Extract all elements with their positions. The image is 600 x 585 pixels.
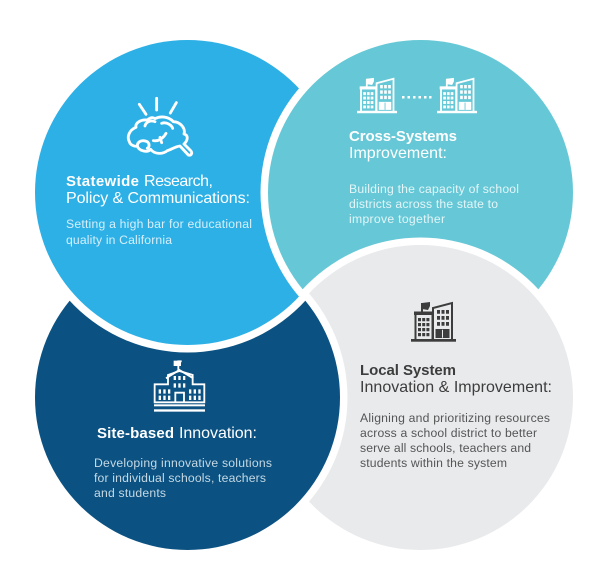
panel: dark blue circle: [35, 300, 340, 550]
text: site-based description: for individual schools, teachers: [94, 471, 266, 485]
text: statewide description: [66, 217, 252, 247]
text: site-based description: [94, 456, 272, 500]
text: local system description: students within the system: [360, 456, 507, 470]
icon: two buildings with dotted connection: [357, 78, 477, 113]
heading: cross-systems: [349, 128, 457, 162]
icon: brain: [128, 98, 192, 155]
heading: site-based: Site-based: [97, 425, 174, 442]
heading: statewide: Research,: [144, 173, 213, 190]
text: local system description: [360, 411, 550, 470]
icon: local building: [411, 302, 456, 342]
text: cross-systems description: districts across the state to: [349, 197, 498, 211]
text: cross-systems description: improve together: [349, 212, 445, 226]
heading: local system: [360, 362, 552, 396]
heading: statewide: Policy & Communications:: [66, 190, 250, 207]
text: statewide description: Setting a high bar for educational: [66, 217, 252, 231]
panel: teal circle: [268, 40, 573, 290]
text: cross-systems description: Building the capacity of school: [349, 182, 519, 196]
panel: grey circle: [309, 245, 573, 550]
text: site-based description: Developing innovative solutions: [94, 456, 272, 470]
heading: local system: Local System: [360, 362, 456, 379]
icon: school: [154, 361, 205, 412]
text: local system description: across a school district to better: [360, 426, 537, 440]
icon: right building: [437, 78, 477, 113]
text: cross-systems description: [349, 182, 519, 226]
text: statewide description: quality in California: [66, 233, 172, 247]
heading: cross-systems: Cross-Systems: [349, 128, 457, 145]
text: local system description: Aligning and prioritizing resources: [360, 411, 550, 425]
heading: local system: Innovation & Improvement:: [360, 379, 552, 396]
icon: dotted line: [402, 96, 432, 98]
heading: cross-systems: Improvement:: [349, 145, 447, 162]
heading: statewide: [66, 173, 250, 207]
icon: left building: [357, 78, 397, 113]
text: site-based description: and students: [94, 486, 166, 500]
text: local system description: serve all schools, teachers and: [360, 441, 531, 455]
heading: site-based: Innovation:: [179, 425, 257, 442]
heading: site-based: [97, 425, 257, 442]
panel: light blue circle: [35, 40, 299, 345]
heading: statewide: Statewide: [66, 173, 139, 190]
